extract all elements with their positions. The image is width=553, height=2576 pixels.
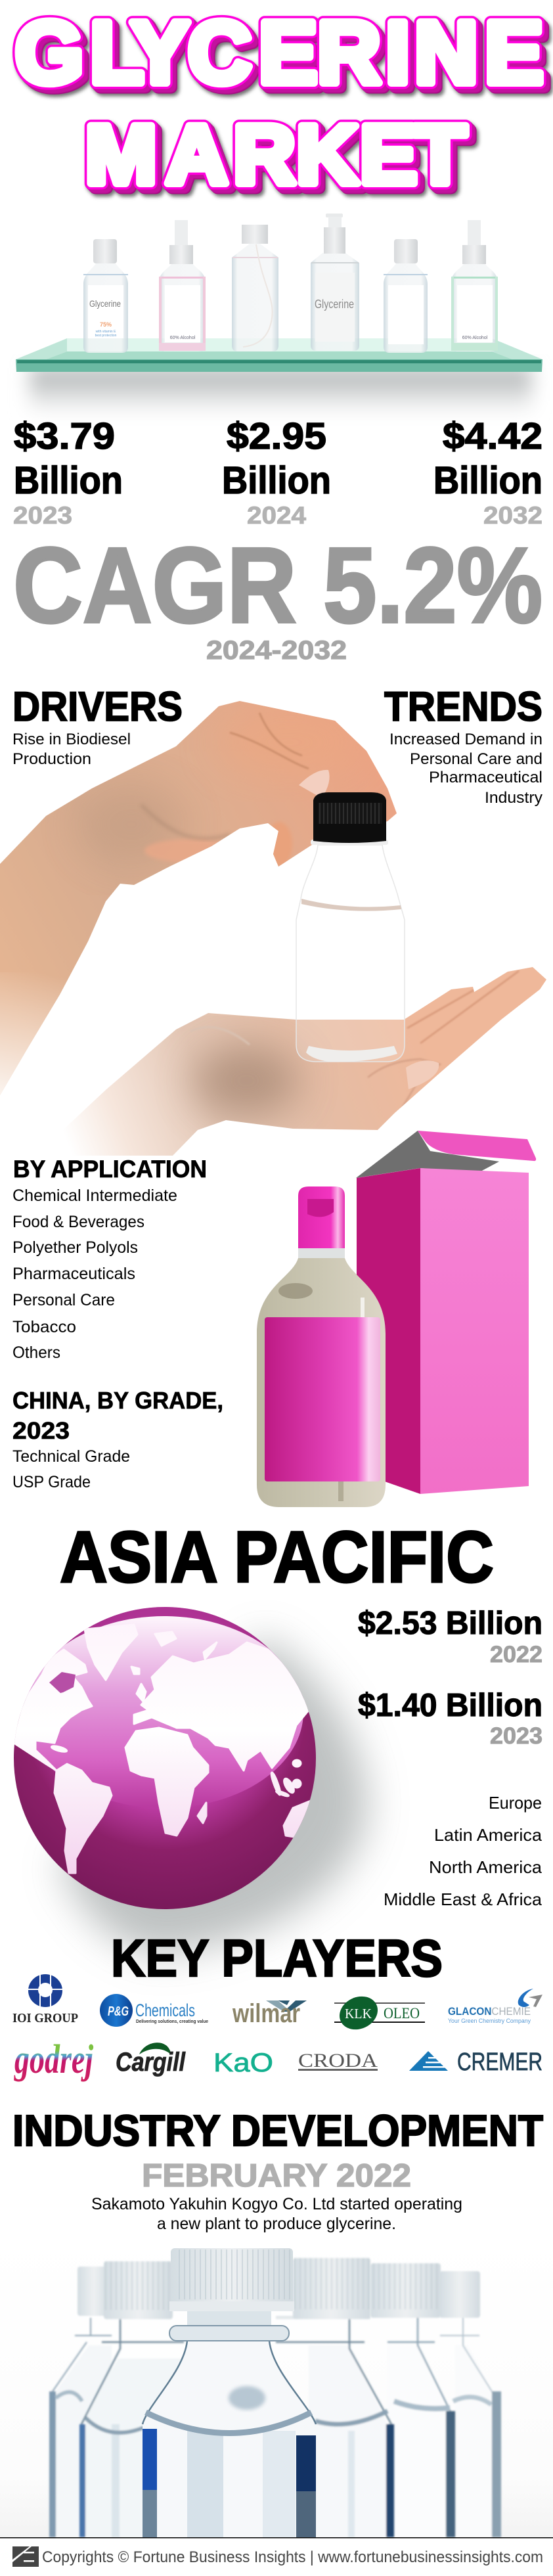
drivers: DRIVERS: [12, 684, 183, 730]
logo: Glacon Chemie: GLACONCHEMIE: [448, 2005, 531, 2018]
bottle 2: [159, 220, 206, 351]
by application list: Pharmaceuticals: [12, 1265, 135, 1283]
regional values: 2023: [490, 1723, 542, 1749]
second right bottle: [370, 2263, 455, 2537]
other regions: North America: [429, 1857, 542, 1877]
trends: [384, 684, 542, 807]
logo: P&G Chemicals: Chemicals: [135, 2000, 195, 2020]
bottle cap: [313, 792, 386, 843]
other regions: Middle East & Africa: [384, 1889, 542, 1909]
logo: Kao: KaO: [213, 2048, 273, 2077]
china by grade list: [12, 1387, 223, 1491]
by application list: Tobacco: [12, 1318, 76, 1336]
continents: [14, 1625, 311, 1873]
regional values: 2022: [490, 1642, 542, 1667]
back right bottle: [439, 2271, 501, 2537]
other regions: [384, 1793, 542, 1909]
asia pacific heading: ASIA PACIFIC: [60, 1517, 494, 1598]
key players heading: KEY PLAYERS: [111, 1929, 443, 1987]
logo: P&G Chemicals: Delivering solutions, creating value: [136, 2020, 208, 2024]
bottle 6: [451, 220, 498, 351]
title: [15, 4, 543, 202]
globe: [13, 1607, 368, 1955]
development date: FEBRUARY 2022: [142, 2158, 411, 2194]
glass bottle: [296, 792, 405, 1062]
stat: 2024: Billion: [222, 459, 331, 502]
trends: Personal Care and: [410, 750, 542, 768]
bottle 1: [83, 239, 128, 353]
trends: TRENDS: [384, 684, 542, 730]
logo: P&G Chemicals: [100, 1994, 208, 2027]
china by grade list: USP Grade: [12, 1473, 91, 1491]
drivers: [12, 684, 183, 768]
box: [356, 1131, 536, 1494]
glass shelf: [16, 338, 542, 372]
by application list: Personal Care: [12, 1291, 115, 1309]
bottle 1: 75%: [100, 321, 112, 328]
logo: KLK Oleo: KLK: [345, 2006, 372, 2022]
logo: Cremer: [409, 2048, 542, 2076]
first right bottle: [276, 2258, 394, 2537]
shelf shadow: [30, 368, 532, 414]
footer: [12, 2546, 543, 2567]
bottle 1: Glycerine: [89, 298, 121, 309]
logo: P&G Chemicals: P&G: [108, 2004, 129, 2019]
trends: Pharmaceutical: [429, 769, 542, 786]
drivers: Rise in Biodiesel: [12, 731, 131, 748]
front bottle: [143, 2248, 316, 2537]
bottle 3: [232, 225, 278, 351]
lower hand: [73, 967, 546, 1156]
china by grade list: 2023: [12, 1417, 70, 1444]
bottle 5: [384, 239, 428, 353]
logo: Wilmar: wilmar: [232, 1999, 300, 2028]
development text: a new plant to produce glycerine.: [157, 2215, 396, 2233]
logo: IOI Group: IOI GROUP: [12, 2011, 78, 2025]
trends: Increased Demand in: [389, 731, 542, 748]
by application list: BY APPLICATION: [13, 1156, 207, 1183]
logo: IOI Group: [12, 1974, 78, 2025]
other regions: Latin America: [434, 1825, 542, 1845]
icon: Fortune Business Insights logo: [12, 2546, 39, 2567]
regional values: [358, 1606, 542, 1749]
bottle 1: with vitamin E: [96, 330, 116, 334]
by application list: [12, 1156, 207, 1362]
logo: Glacon Chemie: [448, 1989, 542, 2024]
title: MARKET: [85, 108, 466, 202]
Hudson Bay: [49, 1672, 76, 1693]
stat: 2032: 2032: [483, 502, 542, 529]
by application list: Polyether Polyols: [12, 1238, 138, 1257]
china by grade list: Technical Grade: [12, 1447, 130, 1466]
CAGR: 2024-2032: [206, 636, 347, 665]
stat: 2023: 2023: [13, 502, 72, 529]
stat: 2023: $3.79: [14, 415, 115, 457]
other regions: Europe: [489, 1793, 542, 1813]
logo: Croda: CRODA: [298, 2050, 378, 2071]
by application list: Chemical Intermediate: [12, 1186, 177, 1205]
stat: 2032: [433, 415, 542, 529]
regional values: $2.53 Billion: [358, 1606, 542, 1641]
development text: [91, 2195, 462, 2233]
stat: 2023: Billion: [14, 459, 123, 502]
second left bottle: [79, 2261, 190, 2537]
by application list: Food & Beverages: [12, 1213, 144, 1231]
bottle 6: 60% Alcohol: [462, 336, 488, 340]
title: GLYCERINE: [15, 4, 543, 102]
clear bottles photo: [0, 2234, 553, 2537]
upper hand and arm: [0, 696, 401, 1097]
globe shadow: [59, 1636, 368, 1955]
logo: Cargill: Cargill: [116, 2048, 186, 2077]
hands holding bottle: [0, 696, 552, 1160]
pink box and bottle: [257, 1131, 536, 1507]
stat: 2024: $2.95: [227, 415, 326, 457]
stat: 2032: $4.42: [443, 415, 542, 457]
footer rule: [0, 2537, 553, 2539]
bottle 2: 60% Alcohol: [170, 336, 196, 340]
drivers: Production: [12, 750, 91, 768]
stat: 2023: [13, 415, 123, 529]
bottle 4: Glycerine: [315, 298, 354, 311]
stat: 2032: Billion: [433, 459, 542, 502]
title: MARKET: [85, 108, 466, 202]
regional values: $1.40 Billion: [358, 1688, 542, 1723]
shelf with bottles: [16, 214, 542, 414]
development text: Sakamoto Yakuhin Kogyo Co. Ltd started operating: [91, 2195, 462, 2213]
trends: Industry: [485, 789, 542, 807]
logo: Glacon Chemie: Your Green Chemistry Company: [448, 2018, 531, 2024]
pink bottle: [257, 1186, 386, 1507]
bottle 1: best protection: [95, 334, 117, 338]
title: GLYCERINE: [15, 4, 543, 102]
china by grade list: CHINA, BY GRADE,: [12, 1387, 223, 1414]
sphere: [13, 1607, 317, 1909]
bottle 4: [311, 214, 359, 351]
stat: 2024: 2024: [247, 502, 306, 529]
logo: Godrej: godrej: [14, 2037, 94, 2082]
back left bottle: [49, 2267, 112, 2537]
copyright text: Copyrights © Fortune Business Insights | www.fortunebusinessinsights.com: [42, 2548, 543, 2566]
by application list: Others: [12, 1344, 60, 1362]
stat: 2024: [222, 415, 331, 529]
logo: KLK Oleo: OLEO: [384, 2005, 420, 2022]
logo: KLK Oleo: [334, 1991, 425, 2035]
